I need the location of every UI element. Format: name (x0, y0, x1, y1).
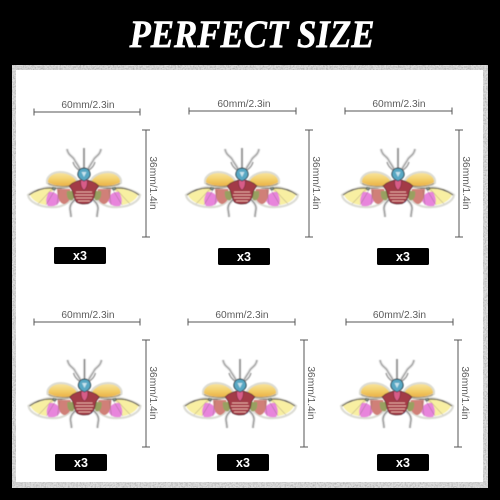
height dimension (454, 340, 470, 447)
width dimension (34, 310, 140, 326)
width dimension: 60mm/2.3in (217, 99, 271, 110)
width dimension (346, 310, 453, 326)
height dimension: 36mm/1.4in (460, 156, 471, 210)
width dimension: 60mm/2.3in (215, 310, 269, 321)
width dimension: 60mm/2.3in (61, 310, 115, 321)
width dimension: 60mm/2.3in (372, 99, 426, 110)
height dimension (305, 130, 321, 237)
quantity badge: x3 (236, 456, 250, 470)
sticker size card: row 2 column 2 (184, 310, 316, 471)
quantity badge: x3 (396, 456, 410, 470)
quantity badge: x3 (74, 456, 88, 470)
sticker size card: row 1 column 2 (186, 99, 321, 265)
height dimension: 36mm/1.4in (147, 366, 158, 420)
height dimension (142, 340, 158, 447)
quantity badge (54, 247, 106, 264)
title: PERFECT SIZE (129, 13, 374, 56)
quantity badge: x3 (396, 250, 410, 264)
quantity badge (377, 248, 429, 265)
height dimension: 36mm/1.4in (459, 366, 470, 420)
icon: beetle sticker (186, 148, 298, 217)
width dimension: 60mm/2.3in (373, 310, 426, 321)
width dimension (34, 100, 140, 116)
width dimension: 60mm/2.3in (61, 100, 115, 111)
quantity badge: x3 (237, 250, 251, 264)
height dimension (300, 340, 316, 447)
sticker size card: row 2 column 1 (28, 310, 158, 471)
icon: beetle sticker (184, 359, 296, 428)
sticker size card: row 1 column 3 (342, 99, 471, 265)
height dimension (142, 130, 158, 237)
width dimension (345, 99, 452, 114)
icon: beetle sticker (28, 148, 140, 217)
icon: beetle sticker (341, 359, 453, 428)
sticker size card: row 1 column 1 (28, 100, 158, 264)
quantity badge (218, 248, 270, 265)
width dimension (189, 99, 296, 114)
quantity badge (217, 454, 269, 471)
icon: beetle sticker (342, 148, 454, 217)
sticker size card: row 2 column 3 (341, 310, 470, 471)
height dimension: 36mm/1.4in (305, 366, 316, 420)
quantity badge: x3 (73, 249, 87, 263)
quantity badge (377, 454, 429, 471)
height dimension: 36mm/1.4in (147, 156, 158, 210)
height dimension (455, 130, 471, 237)
width dimension (188, 310, 295, 326)
icon: beetle sticker (28, 359, 140, 428)
height dimension: 36mm/1.4in (310, 156, 321, 210)
quantity badge (55, 454, 107, 471)
